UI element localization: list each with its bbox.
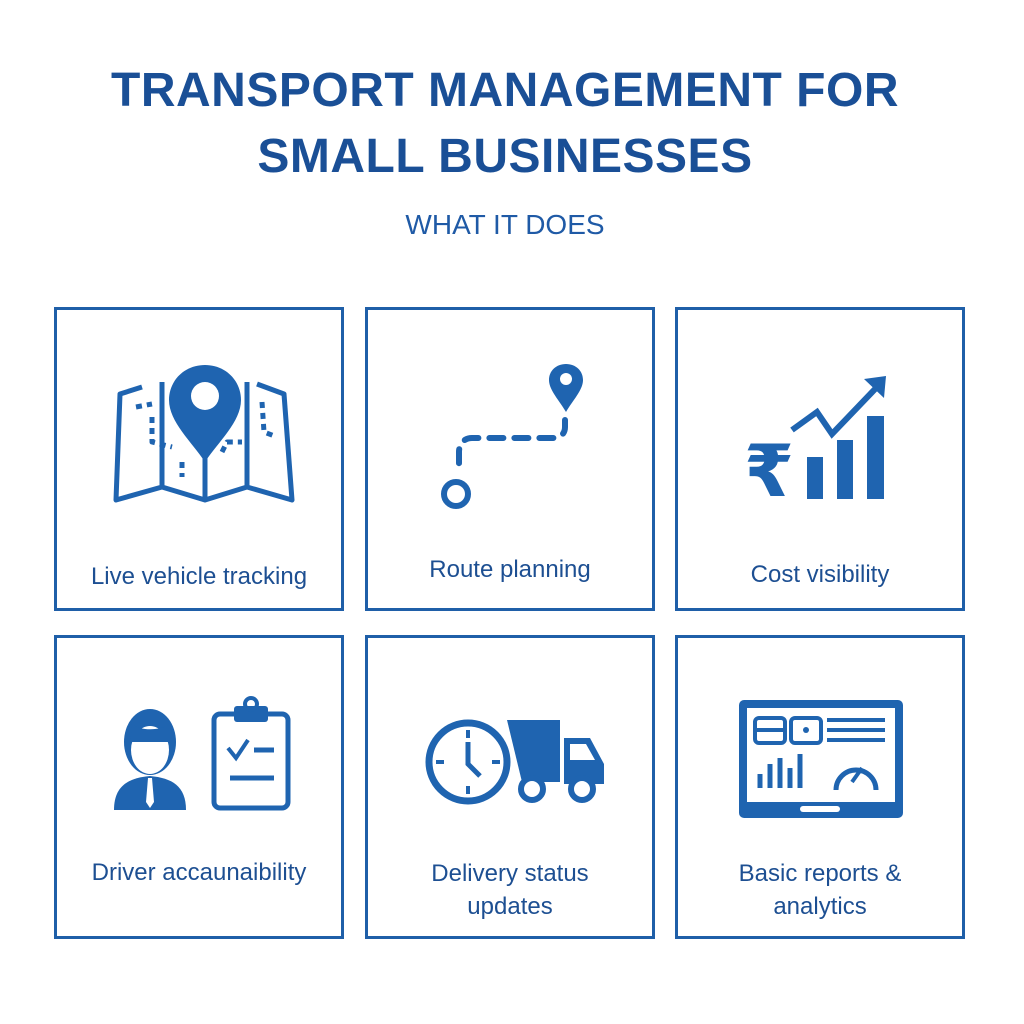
icon: rupee chart: ₹ bbox=[744, 429, 794, 513]
panel: cost visibility bbox=[675, 307, 965, 611]
label: Delivery status bbox=[431, 860, 589, 887]
panel: live vehicle tracking bbox=[54, 307, 344, 611]
label: analytics bbox=[773, 893, 867, 920]
label: Cost visibility bbox=[751, 561, 889, 588]
icon: rupee chart bbox=[744, 376, 886, 513]
label: Driver accaunaibility bbox=[92, 859, 306, 886]
icon: map with pin bbox=[114, 365, 294, 502]
panel: basic reports & analytics bbox=[675, 635, 965, 939]
panel: delivery status updates bbox=[365, 635, 655, 939]
label: Live vehicle tracking bbox=[91, 563, 307, 590]
title: TRANSPORT MANAGEMENT FOR bbox=[111, 64, 899, 117]
title bbox=[111, 64, 899, 183]
icon: clock and truck bbox=[426, 720, 604, 804]
icon: route bbox=[441, 364, 583, 509]
icon: dashboard monitor bbox=[739, 700, 903, 818]
panel: driver accountability bbox=[54, 635, 344, 939]
title: SMALL BUSINESSES bbox=[257, 130, 753, 183]
label bbox=[739, 860, 901, 920]
icon: driver and clipboard bbox=[114, 696, 290, 810]
label: Basic reports & bbox=[739, 860, 901, 887]
panel: route planning bbox=[365, 307, 655, 611]
label: updates bbox=[467, 893, 553, 920]
label: Route planning bbox=[429, 556, 591, 583]
label bbox=[431, 860, 589, 920]
subtitle: WHAT IT DOES bbox=[405, 209, 605, 240]
